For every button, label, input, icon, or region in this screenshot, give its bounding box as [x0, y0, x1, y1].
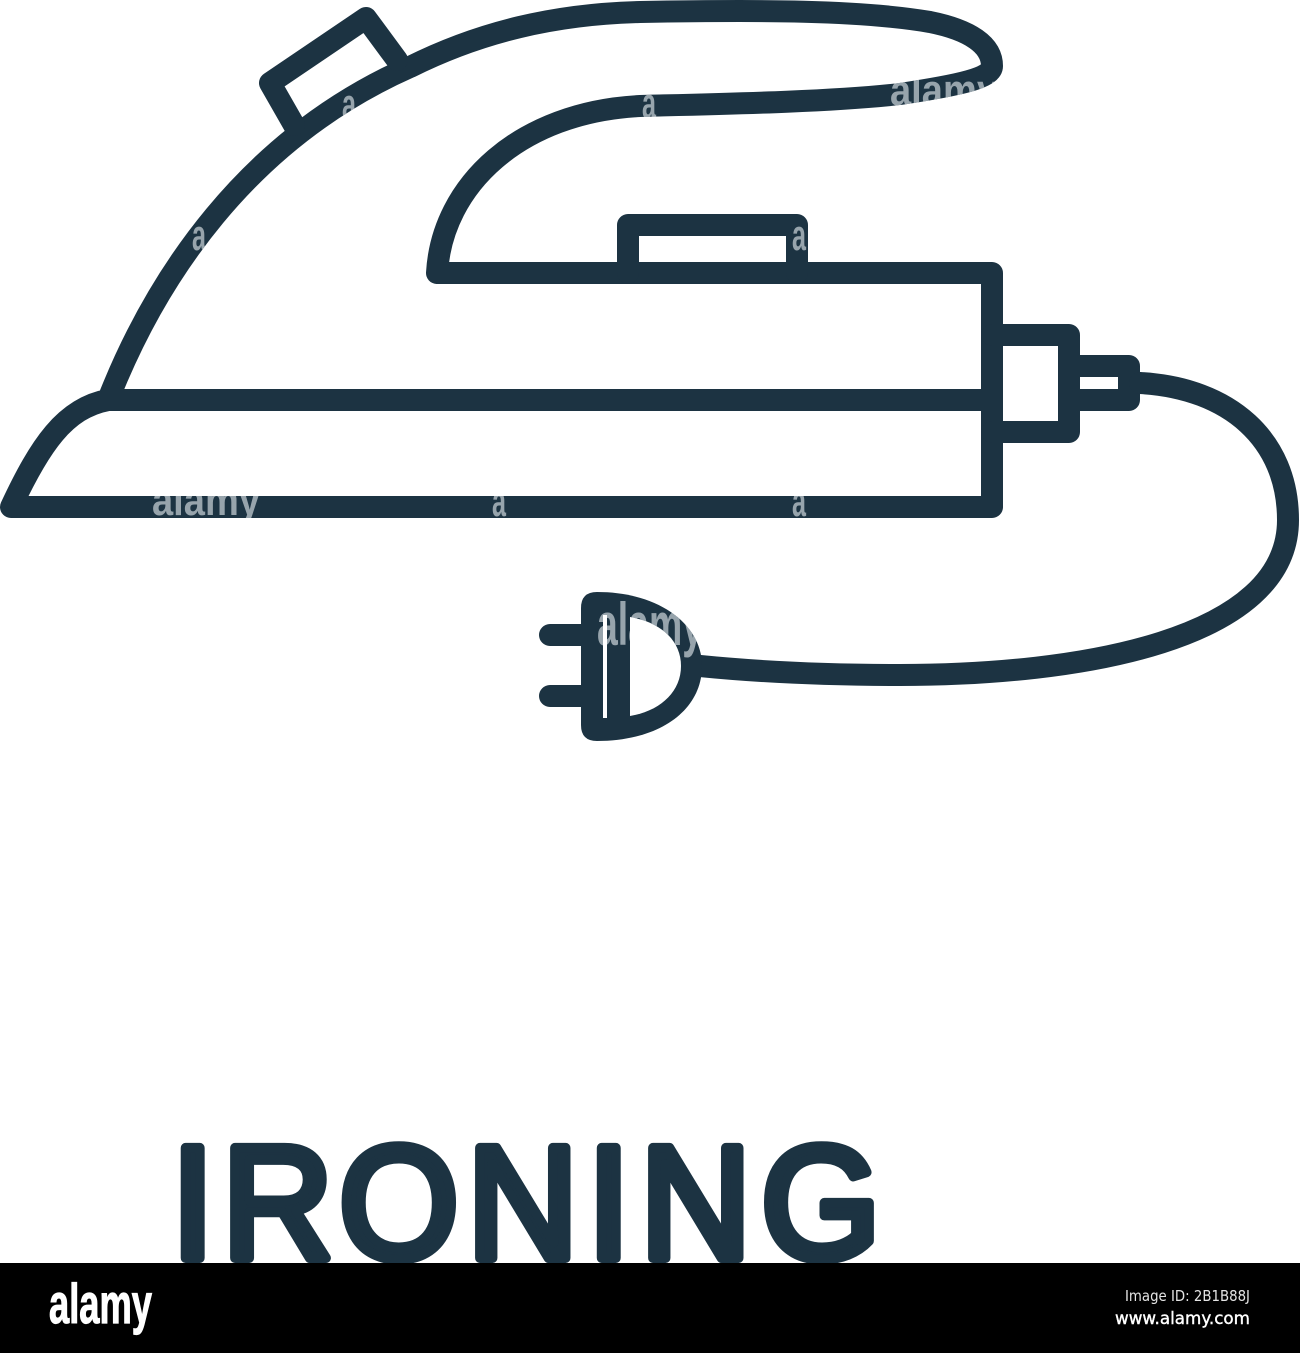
watermarks: alamy: [152, 476, 260, 525]
icon: clothes iron with cord: [11, 11, 1288, 696]
watermarks: a: [642, 79, 656, 128]
temperature button: [270, 18, 397, 125]
watermarks: a: [192, 211, 206, 260]
image id: Image ID: 2B1B88J: [1125, 1287, 1250, 1305]
handle button: [628, 225, 797, 273]
cord connector: [992, 335, 1129, 432]
iron body and soleplate: [11, 11, 992, 507]
watermarks: a: [792, 477, 806, 526]
power cord: [700, 383, 1288, 675]
plug prongs: [550, 635, 590, 696]
icon: plug: [581, 592, 702, 741]
watermarks: a: [342, 80, 356, 129]
watermarks: a: [492, 477, 506, 526]
watermarks: [152, 66, 998, 658]
watermarks: alamy: [890, 66, 998, 115]
footer logo: alamy: [49, 1272, 152, 1335]
title: IRONING: [171, 1114, 881, 1293]
watermarks: alamy: [597, 591, 703, 658]
footer bar: [0, 1263, 1300, 1353]
watermarks: a: [792, 211, 806, 260]
website: www.alamy.com: [1115, 1309, 1250, 1329]
